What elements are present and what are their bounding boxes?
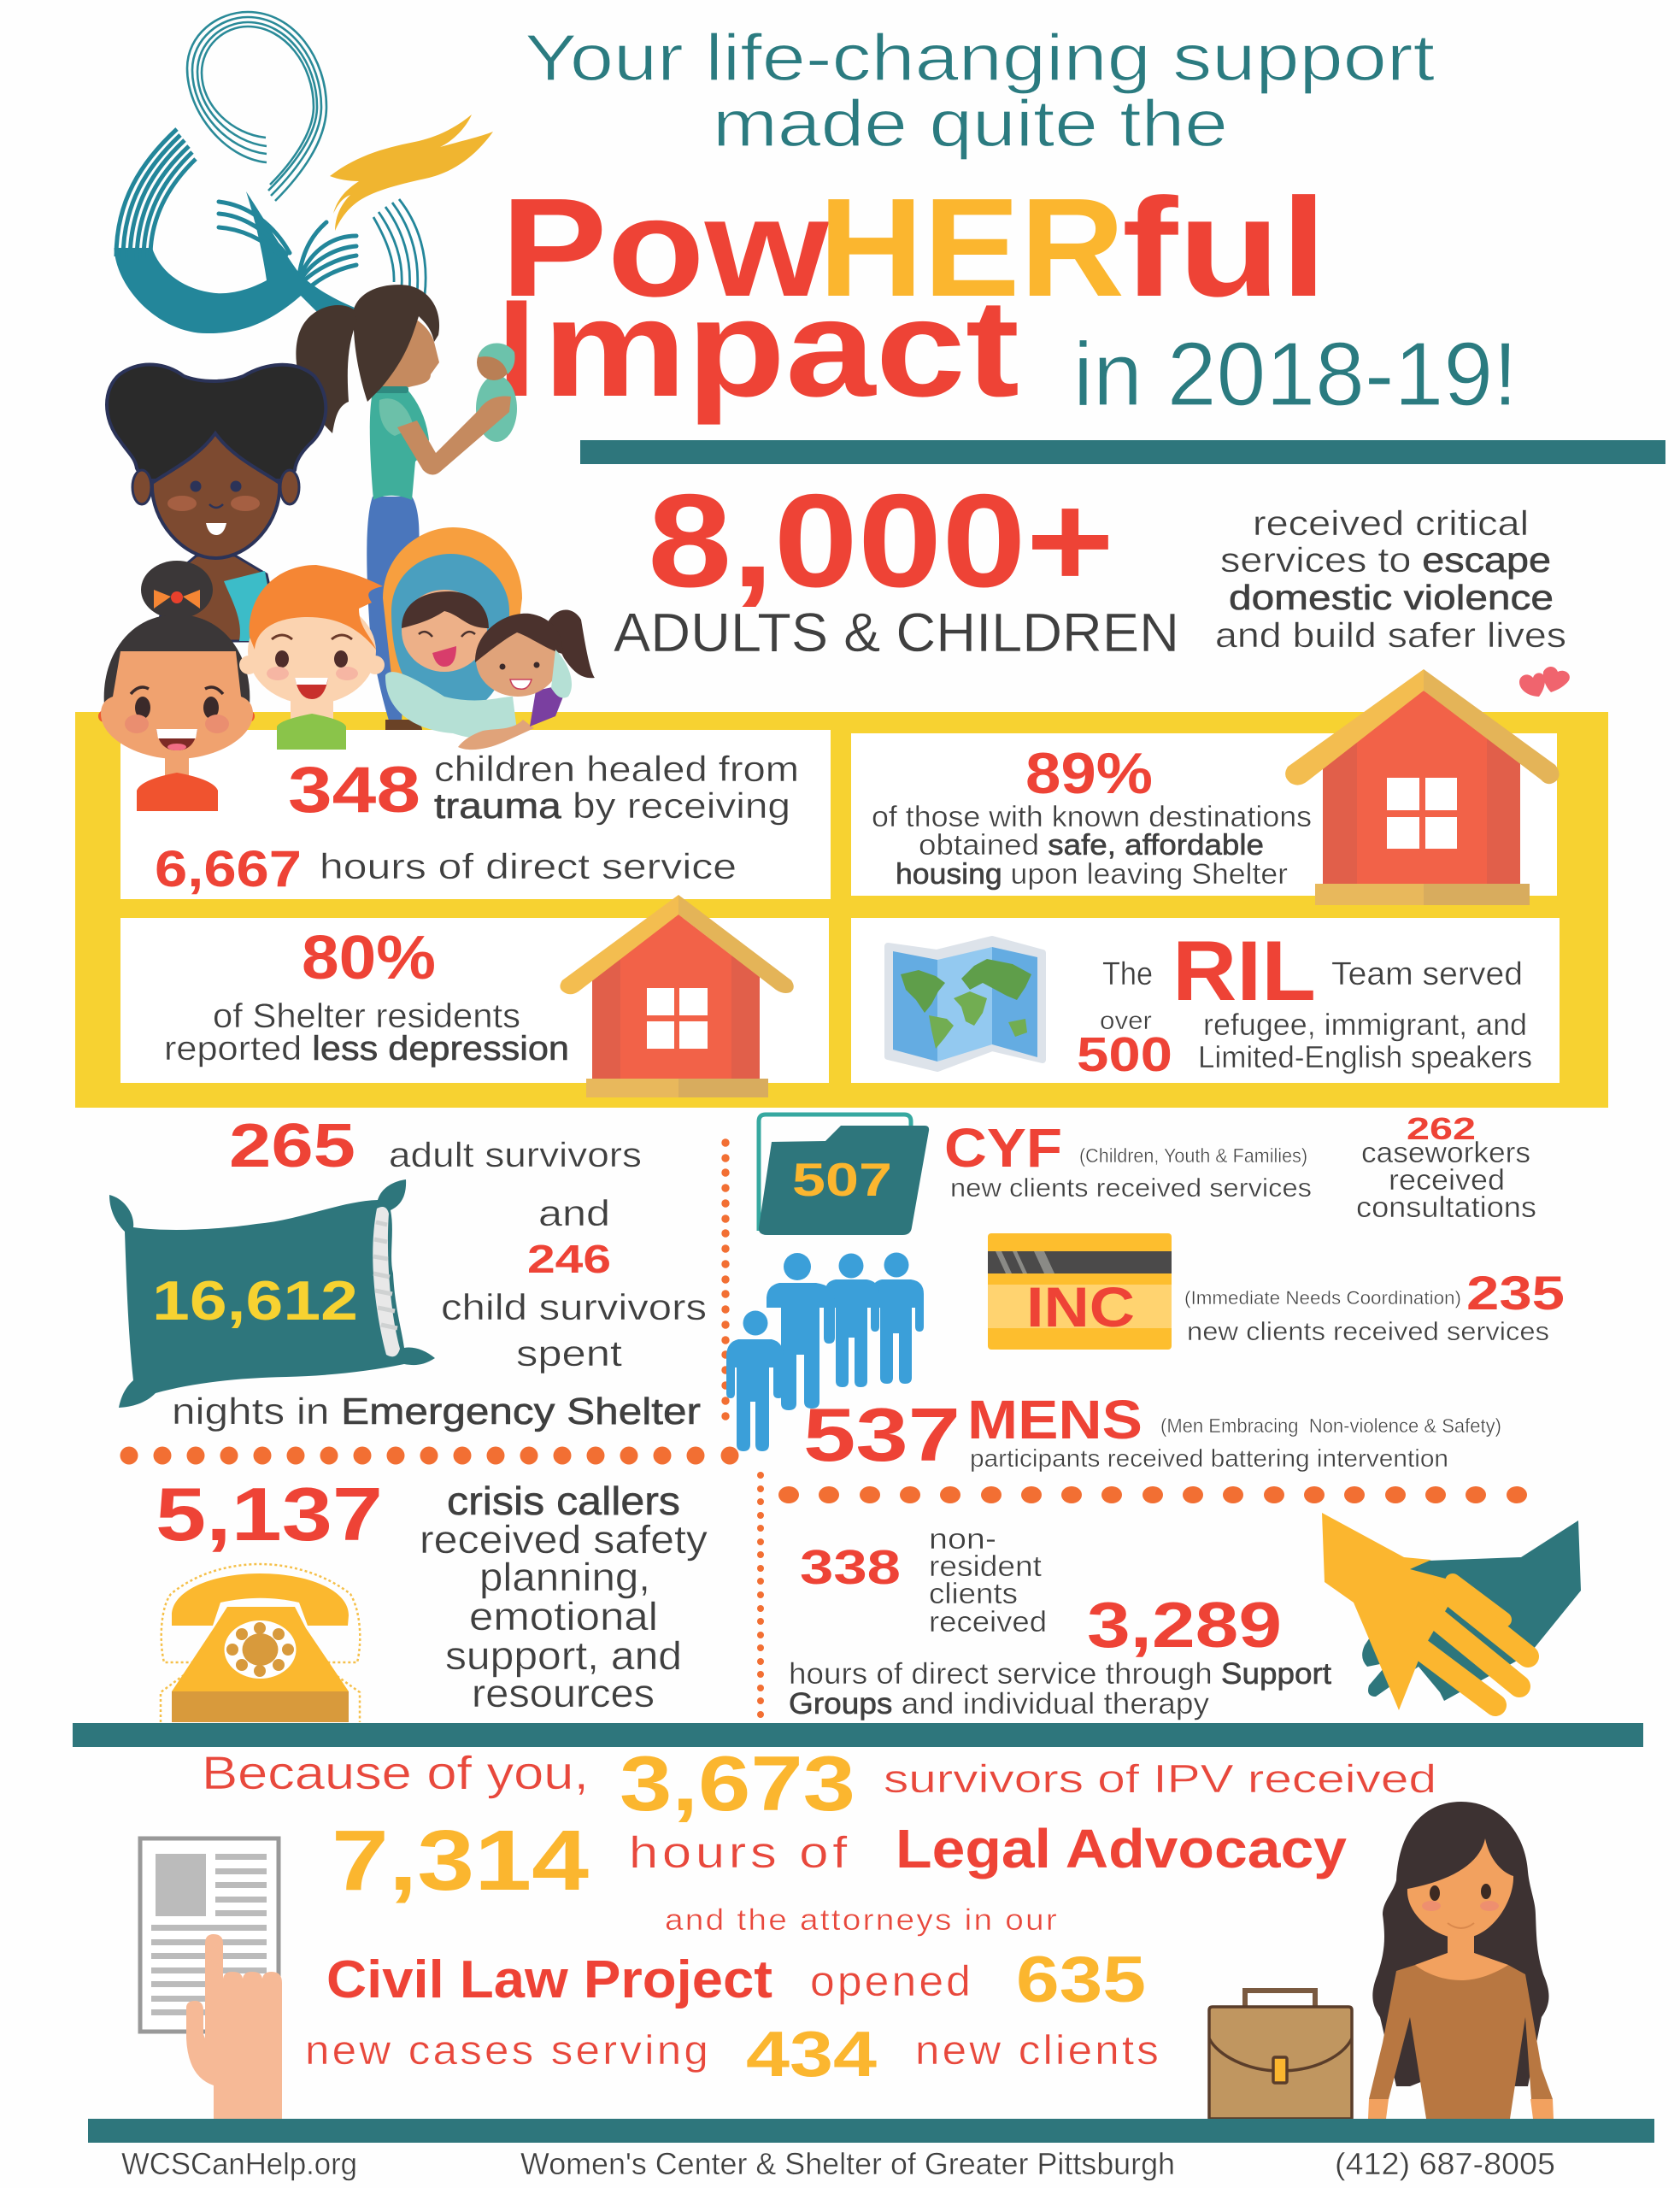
icon: INC card: [988, 1233, 1172, 1350]
card: RIL team: 500: [1077, 1027, 1172, 1082]
title: PowHERful: HER: [819, 169, 1125, 326]
title: PowHERful: Pow: [501, 169, 829, 326]
title: Impact: mpact: [543, 271, 1019, 426]
card: RIL team: Team served: [1331, 956, 1523, 992]
stat: 262 caseworkers: 262: [1407, 1111, 1476, 1146]
icon: handshake: [1322, 1513, 1581, 1710]
illustration: woman with long hair: [1368, 1802, 1554, 2119]
text block: because of you: 434: [746, 2018, 877, 2090]
icon: document: [140, 1838, 279, 2032]
title: in 2018-19: in 2018-19!: [1073, 324, 1518, 425]
card: 89 percent: of those with known destinations: [872, 801, 1312, 833]
stat: MENS 537: [803, 1389, 1501, 1477]
stat: non-resident clients: received: [929, 1606, 1047, 1638]
stat: 262 caseworkers: consultations: [1356, 1191, 1536, 1224]
card: 348 children: [155, 749, 799, 897]
card: RIL team: refugee, immigrant, and: [1203, 1007, 1527, 1042]
dotted divider: horizontal right: [778, 1486, 1527, 1503]
card: RIL team: over: [1100, 1007, 1152, 1035]
text block: because of you: Civil Law Project: [326, 1950, 772, 2009]
card: 89 percent: obtained safe, affordable: [919, 829, 1264, 862]
card: 348 children: 6,667: [155, 840, 302, 897]
illustration: woman holding baby: [296, 285, 439, 730]
stat: non-resident clients: non-: [929, 1523, 996, 1556]
stat: nights in shelter: spent: [516, 1333, 622, 1374]
icon: folder with 507: 507: [792, 1153, 892, 1206]
panel: yellow frame with four statistic cards: [75, 712, 1608, 1108]
icon: pillow: [109, 1179, 435, 1408]
stat: nights in shelter: 265: [229, 1112, 355, 1180]
shirt: [370, 389, 429, 500]
stat: 262 caseworkers: [1356, 1111, 1536, 1224]
text block: because of you: new clients: [915, 2028, 1161, 2073]
icon: briefcase: [1209, 1991, 1352, 2119]
stat: INC 235: new clients received services: [1187, 1316, 1549, 1346]
footer: (412) 687-8005: [1335, 2146, 1555, 2181]
logo: teal and gold ribbon ampersand: [115, 12, 493, 333]
illustration: girl with bow: [98, 561, 255, 811]
text block: received critical services: [1215, 503, 1566, 655]
stat: nights in shelter: and: [538, 1193, 610, 1234]
text block: received critical services: and build safer lives: [1215, 615, 1566, 655]
stat: non-resident clients: resident: [929, 1550, 1043, 1583]
card: 348 children: trauma by receiving: [434, 785, 790, 826]
title: intro lines: made quite the: [713, 87, 1228, 161]
stat: MENS 537: (Men Embracing Non-violence & Safety): [1160, 1415, 1501, 1437]
stat: INC 235: 235: [1466, 1266, 1565, 1320]
title: PowHERful: [501, 169, 1327, 326]
footer: Women's Center & Shelter of Greater Pittsburgh: [520, 2146, 1175, 2181]
icon: world map: [888, 939, 1043, 1068]
icon: rotary telephone: [161, 1564, 360, 1722]
stat: 262 caseworkers: received: [1389, 1164, 1505, 1197]
illustration: baby and supporting arm: [397, 344, 517, 475]
headline stat: 8,000+ adults and children: 8,000+: [648, 467, 1114, 615]
face: [369, 314, 439, 391]
stat: crisis callers: [156, 1472, 708, 1715]
icon: INC card: INC: [1026, 1275, 1135, 1338]
stat: crisis callers: emotional: [469, 1594, 658, 1638]
stat: INC 235: (Immediate Needs Coordination): [1184, 1287, 1461, 1309]
title: Impact: I: [497, 271, 536, 426]
stat: nights in shelter: 16,612: [152, 1269, 358, 1332]
text block: received critical services: services to escape: [1220, 540, 1551, 579]
divider bar: bottom: [88, 2119, 1654, 2143]
stat: crisis callers: planning,: [479, 1555, 650, 1599]
card: 80 percent: reported less depression: [164, 1030, 569, 1068]
card: RIL team: RIL: [1172, 923, 1316, 1018]
text block: because of you: opened: [810, 1957, 973, 2005]
card: 348 children: 348: [288, 754, 420, 826]
text block: because of you: Because of you,: [202, 1746, 589, 1799]
text block: because of you: [202, 1741, 1436, 2090]
card: 80 percent: of Shelter residents: [213, 997, 520, 1035]
stat: crisis callers: support, and: [445, 1633, 682, 1678]
stat: non-resident clients: clients: [929, 1578, 1018, 1610]
stat: non-resident clients: 3,289: [1087, 1589, 1282, 1661]
text block: because of you: and the attorneys in our: [665, 1903, 1059, 1937]
stat: MENS 537: participants received battering intervention: [970, 1445, 1448, 1473]
headline stat: 8,000+ adults and children: ADULTS & CHILDREN: [614, 602, 1179, 663]
stat: CYF: CYF: [944, 1117, 1062, 1179]
stat: non-resident clients: Groups and individual therapy: [789, 1687, 1210, 1720]
icon: house right: [1285, 669, 1560, 905]
text block: because of you: 3,673: [620, 1741, 855, 1827]
text block: received critical services: received critical: [1253, 503, 1529, 543]
card: RIL team: [1077, 923, 1532, 1082]
stat: crisis callers: 5,137: [156, 1472, 383, 1556]
divider bar: top: [580, 440, 1665, 464]
icon: hearts: [1519, 667, 1570, 697]
stat: crisis callers: received safety: [420, 1517, 708, 1562]
divider bar: middle: [73, 1723, 1643, 1747]
illustration: mother in hijab with child: [383, 527, 595, 750]
footer: WCSCanHelp.org: [121, 2146, 357, 2181]
icon: house left: [560, 895, 794, 1097]
icon: group of people: [726, 1253, 924, 1451]
stat: MENS 537: MENS: [967, 1389, 1143, 1450]
stat: nights in shelter: child survivors: [441, 1287, 707, 1328]
stat: 262 caseworkers: caseworkers: [1361, 1137, 1530, 1169]
text block: because of you: survivors of IPV received: [884, 1756, 1436, 1801]
illustration: boy with orange hair: [239, 565, 385, 750]
text block: because of you: 7,314: [332, 1813, 589, 1909]
stat: nights in shelter: [152, 1112, 707, 1432]
stat: CYF: (Children, Youth & Families): [1079, 1144, 1307, 1167]
card: 348 children: children healed from: [434, 749, 799, 789]
stat: MENS 537: 537: [803, 1392, 960, 1477]
title: intro lines: Your life-changing support: [525, 21, 1435, 95]
stat: INC 235: [1184, 1266, 1565, 1346]
stat: nights in shelter: adult survivors: [389, 1135, 642, 1174]
card: RIL team: Limited-English speakers: [1198, 1039, 1532, 1074]
stat: crisis callers: crisis callers: [447, 1479, 680, 1523]
stat: nights in shelter: 246: [527, 1237, 611, 1281]
dotted divider: vertical lower: [757, 1472, 764, 1718]
text block: because of you: 635: [1016, 1944, 1146, 2016]
icon: folder with 507: [759, 1115, 929, 1235]
dotted divider: horizontal left: [120, 1446, 738, 1465]
stat: CYF: [944, 1117, 1312, 1203]
text block: because of you: new cases serving: [305, 2028, 711, 2073]
card: 80 percent: 80%: [302, 924, 436, 992]
card: 89 percent: 89%: [1025, 741, 1153, 806]
card: 89 percent: [872, 741, 1312, 891]
stat: non-resident clients: hours of direct service through Support: [789, 1657, 1331, 1691]
illustration: woman with hair buns: [107, 364, 326, 641]
hair: [354, 285, 439, 402]
text block: because of you: Legal Advocacy: [896, 1818, 1347, 1879]
legs: [367, 497, 420, 723]
card: 80 percent: [164, 924, 569, 1068]
stat: non-resident clients: [789, 1523, 1331, 1720]
text block: because of you: hours of: [629, 1828, 851, 1878]
title: PowHERful: ful: [1122, 169, 1327, 326]
dotted divider: vertical upper: [721, 1138, 730, 1420]
headline stat: 8,000+ adults and children: [614, 467, 1179, 663]
text block: received critical services: domestic violence: [1229, 578, 1554, 617]
card: RIL team: The: [1102, 956, 1153, 992]
stat: nights in shelter: nights in Emergency Shelter: [172, 1391, 701, 1432]
card: 89 percent: housing upon leaving Shelter: [896, 858, 1288, 891]
stat: non-resident clients: 338: [800, 1540, 901, 1595]
stat: CYF: new clients received services: [950, 1173, 1312, 1203]
footer: [121, 2146, 1555, 2181]
stat: crisis callers: resources: [472, 1671, 655, 1715]
card: 348 children: hours of direct service: [320, 846, 737, 886]
title: intro lines: [525, 21, 1435, 161]
icon: pointing hand: [186, 1934, 282, 2119]
